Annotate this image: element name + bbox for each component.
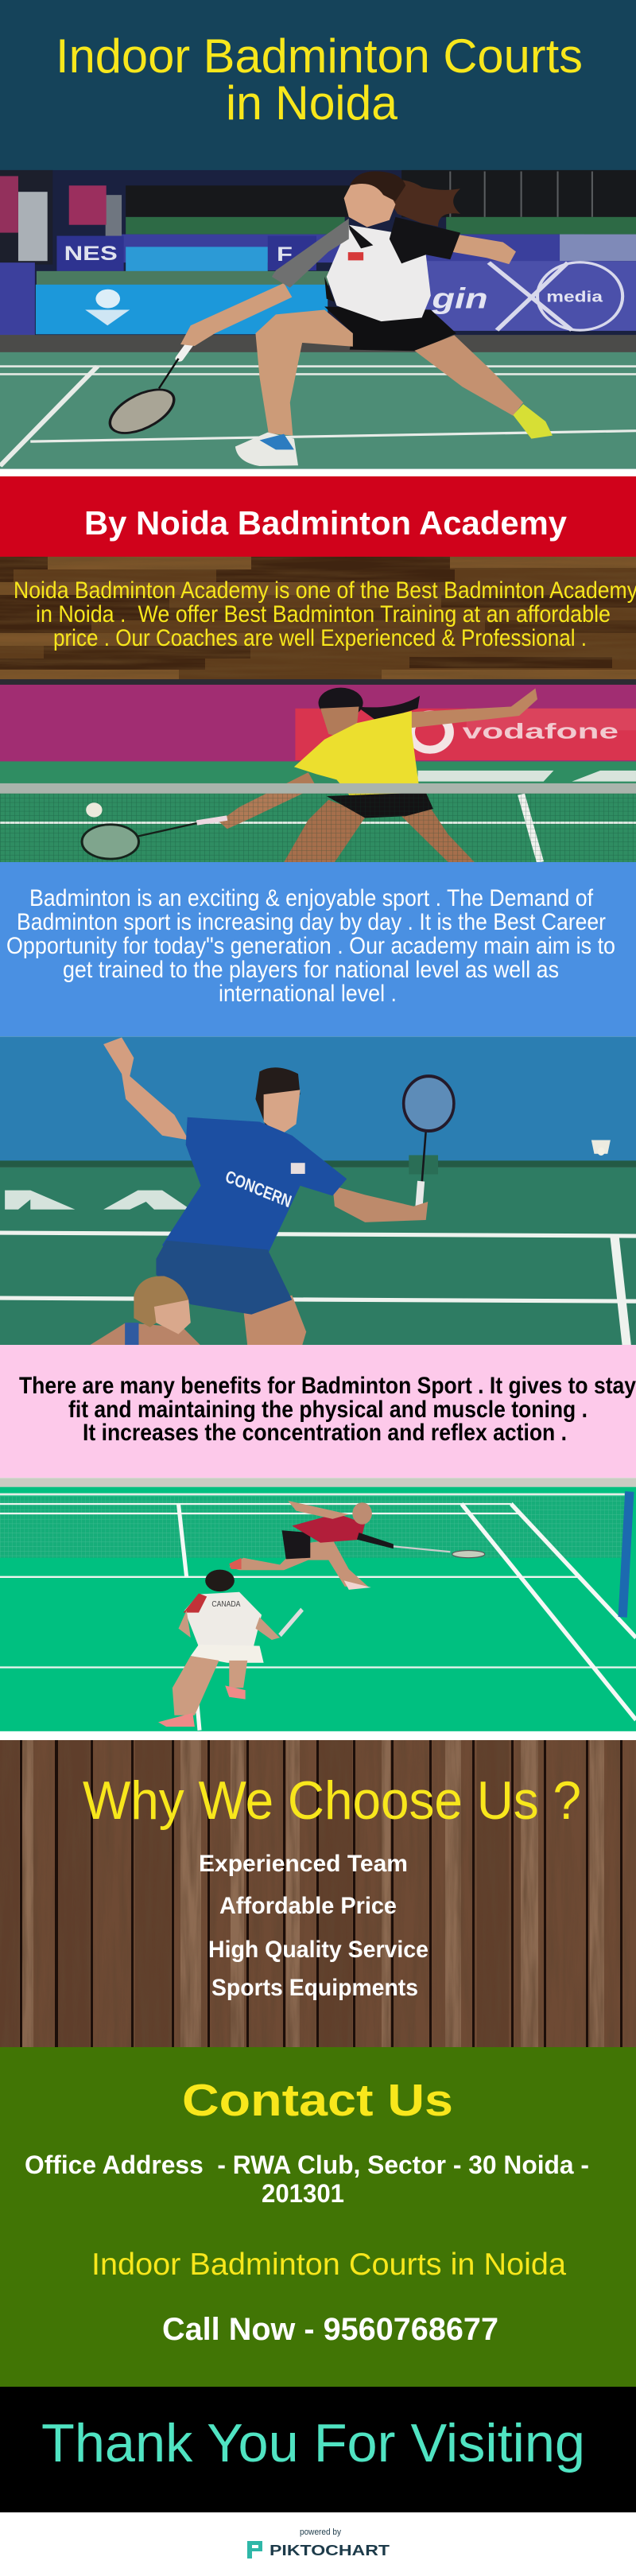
female player foreground <box>89 1276 201 1346</box>
photo: player lunging in white and black kit: media <box>546 288 603 305</box>
phone number: Call Now - 9560768677 <box>162 2312 498 2347</box>
panel: thank you: Thank You For Visiting <box>41 2413 585 2473</box>
title: in Noida <box>226 76 398 130</box>
benefits paragraph: It increases the concentration and reflex action . <box>83 1420 567 1446</box>
reasons list <box>199 1851 429 2001</box>
player <box>103 1037 428 1346</box>
intro paragraph <box>14 577 636 651</box>
player <box>180 171 553 466</box>
reasons list: Experienced Team <box>199 1851 408 1877</box>
racket and shuttlecock <box>82 802 227 859</box>
panel: pink benefits text <box>0 1345 636 1478</box>
office address: 201301 <box>262 2179 344 2208</box>
reasons list: Affordable Price <box>219 1893 397 1919</box>
footer: powered by Piktochart: PIKTOCHART <box>270 2543 390 2559</box>
shuttlecock <box>591 1140 611 1156</box>
footer: powered by Piktochart <box>247 2527 390 2559</box>
photo: male player in blue shirt <box>0 1036 636 1346</box>
photo: player lunging in white and black kit: F <box>277 244 293 266</box>
about paragraph: get trained to the players for national level as well as <box>63 957 559 983</box>
photo: player in yellow kit at the net <box>0 679 636 862</box>
heading: Why We Choose Us: Why We Choose Us ? <box>83 1770 581 1831</box>
photo: player in yellow kit at the net: vodafone <box>463 720 619 743</box>
player <box>219 688 537 862</box>
about paragraph: international level . <box>219 981 397 1007</box>
photo: player lunging in white and black kit: gin <box>431 282 488 314</box>
panel: title header <box>0 0 636 170</box>
title <box>56 29 583 130</box>
benefits paragraph <box>19 1373 636 1446</box>
panel: thank you <box>0 2387 636 2512</box>
red shirt player <box>229 1501 485 1590</box>
about paragraph <box>6 885 615 1007</box>
photo: player lunging in white and black kit <box>0 170 636 469</box>
title: Indoor Badminton Courts <box>56 29 583 83</box>
office address: Office Address - RWA Club, Sector - 30 Noida - <box>25 2151 589 2179</box>
reasons list: Sports Equipments <box>211 1975 418 2001</box>
white shirt player <box>158 1570 302 1727</box>
panel: wood intro text <box>0 557 636 680</box>
office address <box>25 2151 589 2208</box>
white shirt player: CANADA <box>211 1600 241 1608</box>
player: CONCERN <box>223 1167 293 1212</box>
heading: Contact Us: Contact Us <box>182 2075 453 2126</box>
panel: academy banner <box>0 476 636 557</box>
panel: why we choose us <box>0 1740 636 2047</box>
reasons list: High Quality Service <box>208 1937 429 1963</box>
panel: contact us <box>0 2047 636 2387</box>
icon: Piktochart logo <box>247 2541 262 2559</box>
photo: player lunging in white and black kit: NES <box>64 243 118 265</box>
panel: blue about text <box>0 862 636 1036</box>
racket <box>404 1076 454 1206</box>
footer: powered by Piktochart: powered by <box>300 2527 341 2537</box>
heading: By Noida Badminton Academy: By Noida Badminton Academy <box>84 504 568 542</box>
subtitle: Indoor Badminton Courts in Noida <box>91 2248 566 2282</box>
net <box>0 783 636 794</box>
photo: doubles match on green court <box>0 1478 636 1731</box>
racket <box>100 343 191 441</box>
